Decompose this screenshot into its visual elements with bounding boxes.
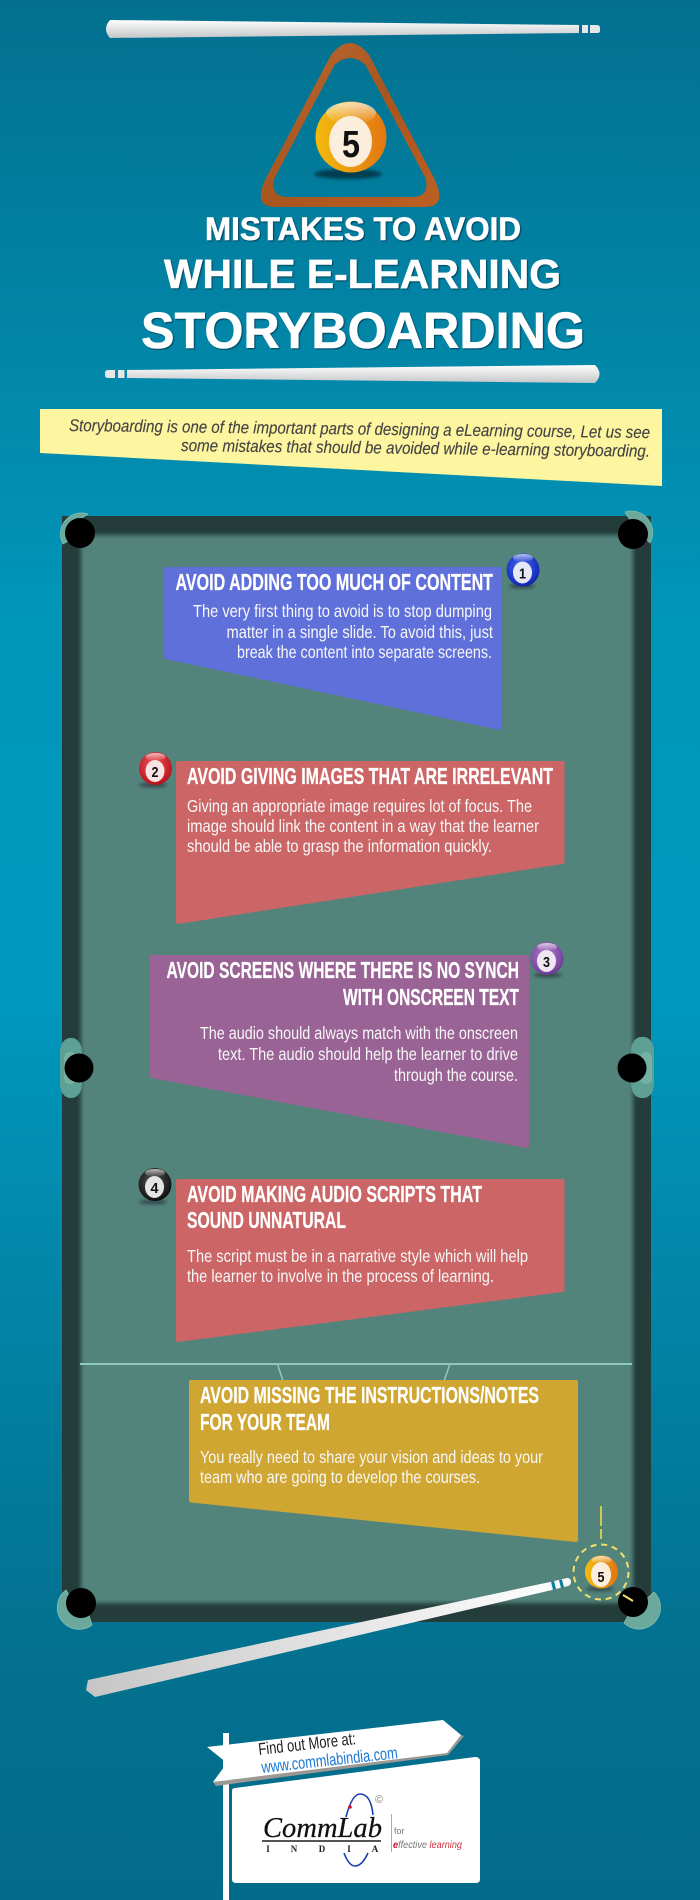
panel: mistake 3: WITH ONSCREEN TEXT [343,984,519,1010]
logo card: effective learning [393,1839,462,1851]
panel: mistake 2: image should link the content in a way that the learner [187,816,539,836]
panel: mistake 1: AVOID ADDING TOO MUCH OF CONTENT [176,569,493,595]
panel: mistake 3: The audio should always match with the onscreen [200,1023,518,1043]
panel: mistake 3: through the course. [394,1065,518,1085]
logo card: © [375,1794,383,1806]
arrow sign: Find out More at: [257,1729,357,1759]
ball five large [314,102,386,179]
panel: mistake 5 [191,1382,576,1540]
ball 2 [139,752,172,788]
logo card: N [291,1844,298,1854]
rack triangle [261,43,439,207]
aiming cue stick [86,1578,571,1697]
panel: mistake 2 [178,763,562,922]
panel: mistake 2: Giving an appropriate image requires lot of focus. The [187,796,532,816]
aim guide [574,1506,633,1601]
logo arc [344,1794,373,1866]
panel: mistake 1: break the content into separate screens. [237,642,492,662]
ball 3 [530,942,564,978]
panel: mistake 5: team who are going to develop the courses. [200,1467,480,1487]
ball 1: 1 [519,566,526,582]
panel: mistake 4: AVOID MAKING AUDIO SCRIPTS THAT [187,1181,482,1207]
title [141,211,585,359]
top cue stick [106,20,600,38]
panel: mistake 2: AVOID GIVING IMAGES THAT ARE IRRELEVANT [187,763,553,789]
title: MISTAKES TO AVOID [205,211,521,247]
logo card: CommLab [263,1813,382,1844]
panel: mistake 5: You really need to share your vision and ideas to your [200,1447,543,1467]
logo card: I [266,1844,270,1854]
sign post [223,1733,229,1900]
arrow sign [207,1720,464,1786]
panel: mistake 5: AVOID MISSING THE INSTRUCTIONS/NOTES [200,1382,539,1408]
logo card: I [347,1844,351,1854]
ball 2: 2 [152,764,158,781]
ball 5 small [585,1556,618,1592]
ball 4: 4 [150,1180,159,1197]
arrow sign: www.commlabindia.com [260,1743,399,1777]
bottom title cue stick [105,365,600,383]
panel: mistake 4: the learner to involve in the process of learning. [187,1266,494,1286]
panel: mistake 3: AVOID SCREENS WHERE THERE IS NO SYNCH [166,957,519,983]
ball 3: 3 [543,954,550,971]
ball 5 small: 5 [598,1569,604,1586]
panel: mistake 3: text. The audio should help the learner to drive [218,1044,518,1064]
logo card [232,1757,480,1883]
pool table [57,511,661,1629]
panel: mistake 3 [152,957,527,1146]
panel: mistake 1: The very first thing to avoid is to stop dumping [193,601,492,621]
intro banner: some mistakes that should be avoided while e-learning storyboarding. [181,436,650,461]
intro banner [40,409,662,486]
ball 4 [138,1168,172,1204]
panel: mistake 1 [166,569,500,728]
logo card: D [319,1844,326,1854]
panel: mistake 1: matter in a single slide. To avoid this, just [226,622,493,642]
panel: mistake 5: FOR YOUR TEAM [200,1409,330,1435]
panel: mistake 4: The script must be in a narrative style which will help [187,1246,528,1266]
panel: mistake 4 [178,1181,562,1340]
ball five large: 5 [342,124,360,166]
panel: mistake 4: SOUND UNNATURAL [187,1207,346,1233]
title: WHILE E-LEARNING [164,251,561,297]
panel: mistake 2: should be able to grasp the information quickly. [187,836,492,856]
logo card: A [372,1844,379,1854]
title: STORYBOARDING [141,302,585,359]
logo card: for [394,1826,405,1836]
ball 1 [506,554,540,588]
